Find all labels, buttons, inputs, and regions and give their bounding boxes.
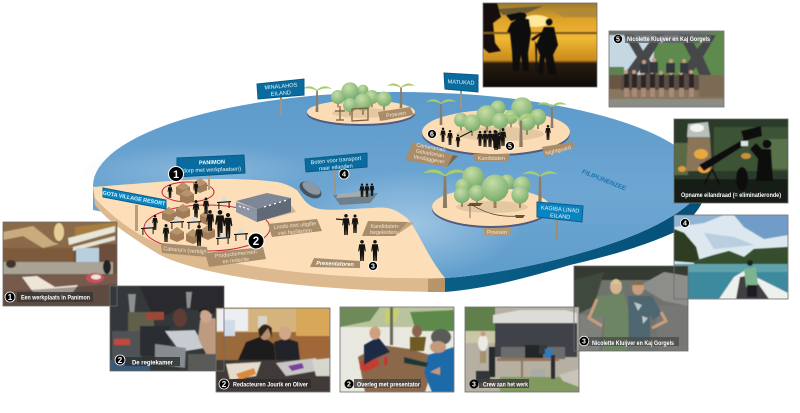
palms bbox=[422, 169, 558, 208]
motor boat bbox=[333, 191, 378, 205]
crew silhouettes bbox=[440, 128, 472, 147]
marker 6 bbox=[428, 130, 436, 138]
caption: De regiekamer bbox=[132, 360, 173, 366]
people on boat bbox=[360, 183, 374, 197]
marker 2: 2 bbox=[347, 382, 351, 388]
label: crew roles bbox=[405, 142, 458, 167]
rowing boat bbox=[297, 178, 324, 202]
sign: boats bbox=[305, 153, 367, 194]
sign: Kagiba Linad Eiland: EILAND bbox=[550, 213, 570, 221]
trees bbox=[331, 82, 392, 115]
marker 2: 2 bbox=[118, 356, 123, 365]
sign: boats: Boten voor transport bbox=[310, 156, 362, 166]
label: production: Productiemensen bbox=[215, 249, 257, 260]
label: guides: Kandidaten- bbox=[370, 224, 400, 230]
label: Nightguard bbox=[542, 142, 575, 157]
label: Proeven bbox=[483, 228, 511, 236]
photo: workshop bbox=[3, 222, 117, 306]
photo: editors bbox=[216, 308, 330, 392]
label: guides: begeleiders bbox=[370, 230, 398, 236]
label: shed: van faciliteiten bbox=[278, 228, 312, 237]
marker 5 bbox=[506, 142, 514, 150]
sea surface bbox=[93, 92, 705, 278]
label: shed: Loods met uitgifte bbox=[273, 221, 316, 231]
workers bbox=[152, 181, 232, 246]
label: Proeven bbox=[378, 107, 414, 121]
caption: Overleg met presentator bbox=[357, 382, 420, 388]
main island side dark end bbox=[428, 278, 445, 292]
marker 2 bbox=[248, 233, 264, 249]
marker 3: 3 bbox=[582, 338, 586, 346]
red circle camp bbox=[144, 205, 270, 251]
marker 5: 5 bbox=[616, 36, 620, 44]
label: production: en redactie bbox=[222, 257, 249, 265]
red circle Panimon bbox=[162, 182, 214, 202]
island base bbox=[422, 112, 570, 156]
huts bbox=[162, 178, 215, 244]
sign: Panimon bbox=[177, 155, 245, 190]
marker 2: 2 bbox=[253, 236, 259, 248]
label: Nightguard: Nightguard bbox=[545, 145, 572, 157]
marker 3 bbox=[368, 262, 378, 270]
palms bbox=[426, 99, 567, 147]
night guard bbox=[545, 125, 551, 140]
sign: Minalahos Eiland: EILAND bbox=[271, 90, 291, 98]
sign: Panimon: (dorp met werkplaatsen) bbox=[181, 166, 241, 175]
presenters bbox=[358, 240, 379, 261]
sign: Minalahos Eiland: MINALAHOS bbox=[264, 83, 298, 91]
island: Minalahos bbox=[257, 79, 415, 126]
label: Kandidaten bbox=[473, 154, 510, 162]
marker 4: 4 bbox=[342, 170, 347, 178]
island top bbox=[422, 110, 570, 154]
island base bbox=[432, 190, 550, 228]
candidates group bbox=[477, 128, 506, 150]
label: crew roles: Geluidsman bbox=[415, 149, 445, 159]
marker 1: 1 bbox=[173, 169, 179, 181]
label: Proeven: Proeven bbox=[386, 111, 406, 119]
sign: Matukad: MATUKAD bbox=[447, 79, 475, 87]
label: Cabana's: Cabana's (verblijf) bbox=[163, 246, 207, 256]
sign: Panimon: PANIMON bbox=[199, 160, 225, 166]
island top bbox=[307, 100, 415, 124]
disc edge bbox=[445, 186, 705, 292]
palms bbox=[302, 84, 415, 112]
label: crew roles: Cameraman bbox=[416, 143, 446, 154]
marker 2: 2 bbox=[222, 380, 227, 389]
photo: control room bbox=[110, 286, 224, 371]
label: Cabana's bbox=[161, 243, 208, 257]
island top bbox=[432, 188, 550, 226]
trees bbox=[454, 166, 531, 208]
label: sea name: FILIPIJNENZEE bbox=[581, 168, 628, 193]
sea glow bbox=[300, 170, 520, 280]
photo: meeting with presenter bbox=[340, 307, 454, 392]
marker 4: 4 bbox=[683, 220, 687, 228]
tree shadows bbox=[456, 127, 544, 141]
sign: Kagiba Linad Eiland bbox=[537, 202, 583, 239]
boats area bbox=[297, 153, 378, 205]
marker 1: 1 bbox=[8, 293, 13, 302]
label: crew roles: Verslaggever bbox=[413, 154, 445, 166]
marker 6: 6 bbox=[430, 132, 434, 138]
desks bbox=[141, 197, 248, 245]
photo: Nicolette and Kaj bbox=[574, 266, 688, 351]
main island side bbox=[93, 186, 445, 292]
marker 5: 5 bbox=[508, 144, 512, 150]
label: shed bbox=[268, 219, 322, 237]
caption: Een werkplaats in Panimon bbox=[21, 294, 90, 302]
candidate guides bbox=[336, 214, 358, 235]
label: presenters: Presentatoren bbox=[316, 261, 354, 268]
camp area on main island bbox=[102, 155, 414, 270]
photo: group 5 bbox=[609, 31, 724, 107]
label: production bbox=[205, 247, 266, 267]
marker 3: 3 bbox=[371, 264, 375, 270]
caption: Crew aan het werk bbox=[483, 382, 528, 388]
marker 1 bbox=[168, 166, 184, 182]
label: guides bbox=[362, 221, 414, 236]
marker 3: 3 bbox=[472, 382, 476, 388]
photo: crew bbox=[465, 307, 579, 392]
label: Kandidaten: Kandidaten bbox=[478, 156, 505, 162]
caption: Redacteuren Jourik en Oliver bbox=[233, 382, 308, 388]
tree shadows bbox=[332, 108, 392, 118]
label: presenters bbox=[310, 258, 360, 268]
island base bbox=[307, 102, 415, 126]
trees bbox=[454, 97, 546, 136]
tree shadows bbox=[456, 201, 528, 213]
main island surface bbox=[93, 179, 445, 278]
rope course bbox=[467, 203, 525, 218]
sign: Minalahos Eiland bbox=[257, 79, 304, 116]
photo: sunset crew bbox=[483, 3, 597, 87]
sign: Gota Village Resort: GOTA VILLAGE RESORT bbox=[102, 190, 166, 208]
island: Matukad bbox=[405, 73, 575, 167]
wooden frame bbox=[335, 106, 368, 121]
sea glow left bbox=[80, 144, 320, 196]
sign: Gota Village Resort bbox=[102, 188, 166, 231]
photo: island council bbox=[674, 119, 788, 203]
island: Kagiba Linad bbox=[422, 166, 583, 239]
sign: Kagiba Linad Eiland: KAGIBA LINAD bbox=[541, 205, 580, 215]
sign: Matukad bbox=[444, 73, 478, 109]
photo: boat bbox=[674, 215, 788, 299]
map: disc with sea and main island bbox=[80, 92, 705, 292]
building bbox=[236, 193, 296, 222]
sign: boats: naar eilanden bbox=[319, 164, 353, 172]
label: Proeven: Proeven bbox=[487, 230, 507, 236]
